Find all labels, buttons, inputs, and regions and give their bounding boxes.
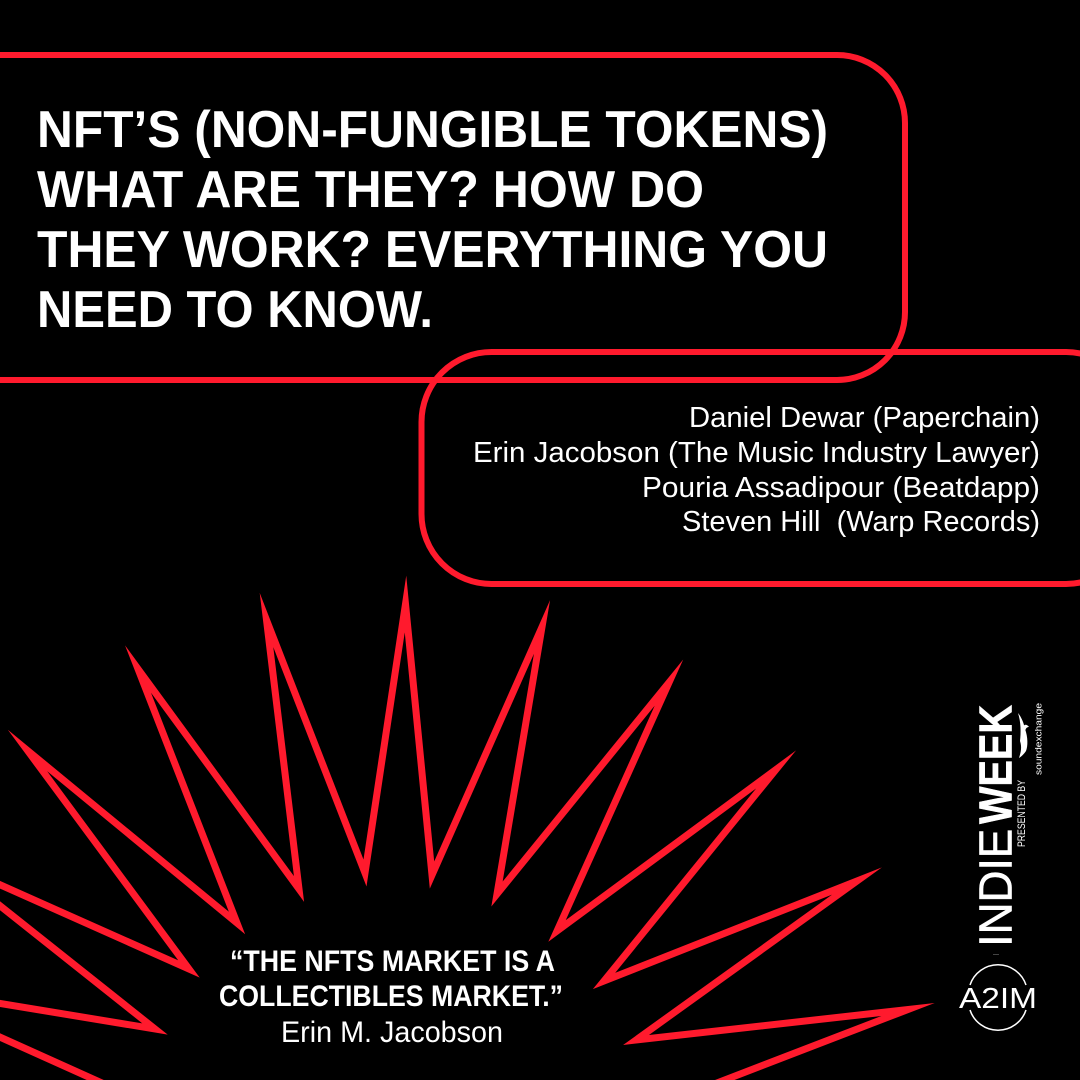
speakers list	[473, 402, 1040, 538]
panel: title outline	[0, 55, 905, 380]
speakers list: Steven Hill (Warp Records)	[682, 506, 1040, 538]
quote	[219, 945, 563, 1049]
starburst graphic	[0, 604, 908, 1080]
heading: NEED TO KNOW.	[37, 281, 433, 339]
logo: A2IM	[959, 965, 1037, 1030]
speakers list: Daniel Dewar (Paperchain)	[689, 402, 1040, 434]
logo: Indieweek presented by SoundExchange: soundexchange	[1034, 703, 1044, 775]
heading: WHAT ARE THEY? HOW DO	[37, 161, 704, 219]
quote: “THE NFTS MARKET IS A	[230, 945, 555, 978]
logo: A2IM: A2IM	[959, 983, 1037, 1015]
heading: NFT’S (NON-FUNGIBLE TOKENS)	[37, 101, 828, 159]
logo: Indieweek presented by SoundExchange: PRESENTED BY	[1016, 779, 1028, 847]
logo: Indieweek presented by SoundExchange: WEEK	[970, 705, 1022, 824]
speakers list: Pouria Assadipour (Beatdapp)	[642, 472, 1040, 504]
heading	[37, 101, 828, 339]
logo: Indieweek presented by SoundExchange: INDIE	[970, 829, 1022, 947]
logo: Indieweek presented by SoundExchange	[970, 703, 1044, 947]
quote: Erin M. Jacobson	[281, 1016, 503, 1049]
quote: COLLECTIBLES MARKET.”	[219, 980, 563, 1013]
panel: speakers outline	[422, 352, 1080, 584]
heading: THEY WORK? EVERYTHING YOU	[37, 221, 828, 279]
speakers list: Erin Jacobson (The Music Industry Lawyer)	[473, 437, 1040, 469]
